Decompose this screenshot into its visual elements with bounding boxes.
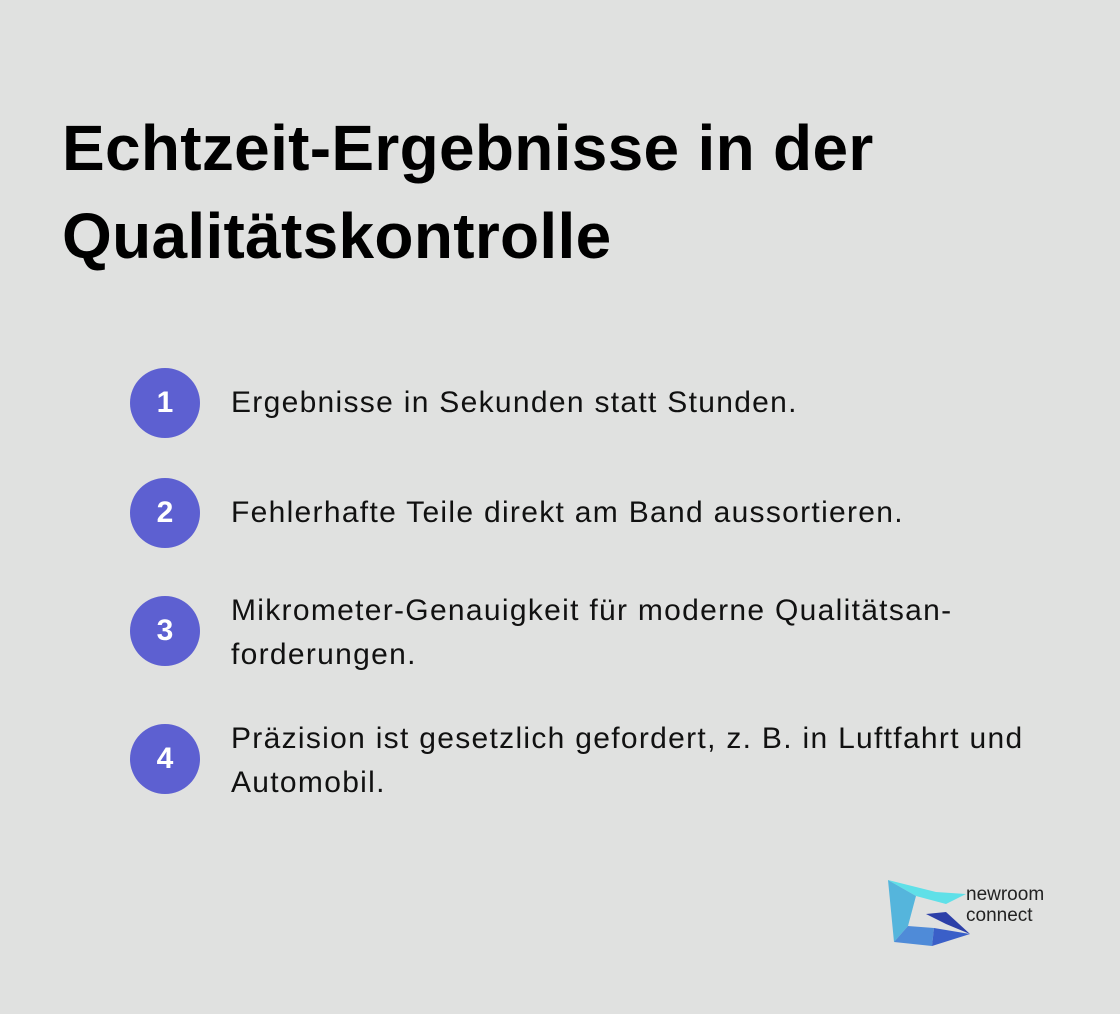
title: Qualitätskontrolle	[62, 200, 612, 272]
logo: newroom	[966, 884, 1044, 905]
item 3	[130, 594, 952, 671]
item 2: Fehlerhafte Teile direkt am Band aussortieren.	[231, 496, 904, 529]
item 1: 1	[157, 386, 173, 419]
item 3: forderungen.	[231, 638, 417, 671]
item 1: Ergebnisse in Sekunden statt Stunden.	[231, 386, 798, 419]
item 3: Mikrometer-Genauigkeit für moderne Qualitätsan-	[231, 594, 952, 627]
item 4	[130, 722, 1023, 799]
logo	[888, 880, 1044, 946]
item 3: 3	[157, 614, 173, 647]
item 4: Präzision ist gesetzlich gefordert, z. B. in Luftfahrt und	[231, 722, 1023, 755]
title: Echtzeit-Ergebnisse in der	[62, 112, 874, 184]
item 4: 4	[157, 742, 173, 775]
title	[62, 112, 874, 272]
logo: connect	[966, 905, 1033, 926]
item 4: Automobil.	[231, 766, 386, 799]
item 2: 2	[157, 496, 173, 529]
item 2	[130, 478, 904, 548]
item 1	[130, 368, 798, 438]
